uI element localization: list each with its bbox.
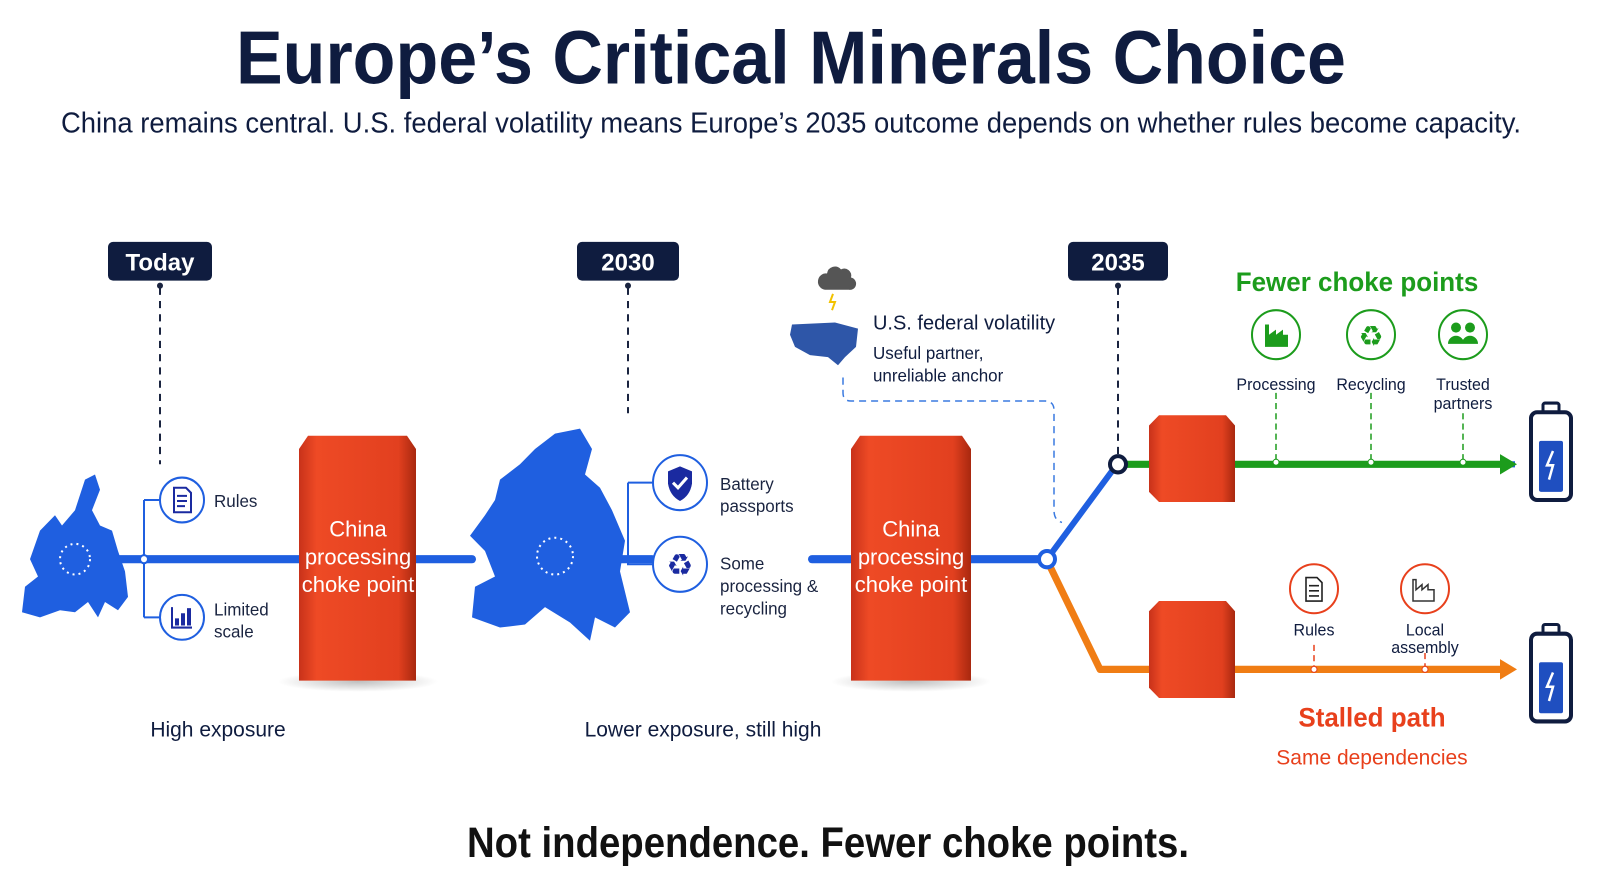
US volatility callout: Useful partner, xyxy=(873,343,983,363)
2030 branch icons: processing & xyxy=(720,576,819,596)
choke block 2: processing xyxy=(858,544,964,569)
2030 branch icons: passports xyxy=(720,496,794,516)
timeline labels xyxy=(108,242,1168,464)
choke block 2: choke point xyxy=(855,572,968,597)
2030 branch icons: recycling xyxy=(720,598,787,618)
choke block 1: China xyxy=(329,517,387,542)
choke block 1: choke point xyxy=(302,572,415,597)
today branch icons: Rules xyxy=(214,491,257,511)
orange icons: Local xyxy=(1406,622,1444,640)
branches xyxy=(1039,454,1517,680)
orange icons xyxy=(1290,564,1460,672)
orange icons: Rules xyxy=(1294,622,1334,640)
main blue line xyxy=(100,555,1047,563)
green icons xyxy=(1236,310,1492,465)
green icons: Recycling xyxy=(1336,376,1406,394)
stalled path label xyxy=(1276,702,1468,769)
2030 branch icons: Some xyxy=(720,553,764,573)
timeline labels: 2035 xyxy=(1091,249,1145,276)
choke block 1 xyxy=(278,436,438,692)
map: Europe 2030 xyxy=(470,429,630,641)
title: Europe’s Critical Minerals Choice xyxy=(236,15,1346,100)
green path heading: Fewer choke points xyxy=(1236,267,1478,297)
choke block 2: China xyxy=(882,517,940,542)
bottom tagline: Not independence. Fewer choke points. xyxy=(467,819,1189,866)
timeline labels: Today xyxy=(126,249,195,276)
orange icons: assembly xyxy=(1391,639,1460,657)
2030 branch icons: ♻ xyxy=(667,549,693,583)
US volatility callout: unreliable anchor xyxy=(873,365,1004,386)
batteries xyxy=(1531,403,1571,721)
choke block 2 xyxy=(831,436,991,692)
subtitle: China remains central. U.S. federal volatility means Europe’s 2035 outcome depends on whether rules become capacity. xyxy=(61,106,1521,139)
green icons: Processing xyxy=(1236,376,1316,394)
timeline labels: 2030 xyxy=(601,249,655,276)
text: Lower exposure, still high xyxy=(585,719,821,742)
today branch icons: scale xyxy=(214,622,254,642)
exposure labels: High exposure xyxy=(150,719,286,742)
US volatility callout: U.S. federal volatility xyxy=(873,312,1056,335)
US volatility callout xyxy=(790,267,1062,522)
stalled path label: Stalled path xyxy=(1298,702,1446,733)
2030 branch icons: Battery xyxy=(720,474,774,494)
map: Europe today xyxy=(22,474,128,617)
green icons: ♻ xyxy=(1358,320,1384,352)
today branch icons: Limited xyxy=(214,599,269,619)
upper cube xyxy=(1149,415,1235,502)
green icons: partners xyxy=(1434,395,1492,413)
lower cube xyxy=(1149,601,1235,698)
stalled path label: Same dependencies xyxy=(1276,746,1468,769)
choke block 1: processing xyxy=(305,544,411,569)
green icons: Trusted xyxy=(1436,376,1490,394)
2030 branch icons xyxy=(628,455,819,618)
today branch icons xyxy=(140,478,269,642)
